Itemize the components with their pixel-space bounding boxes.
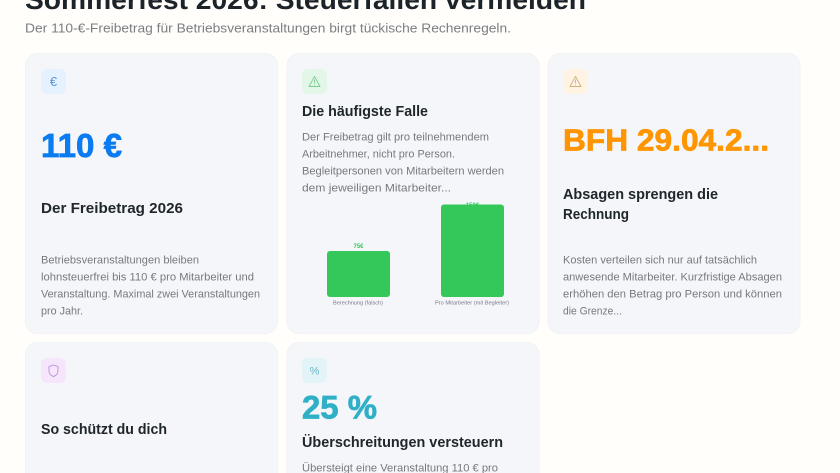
body text xyxy=(563,254,782,318)
heading: Rechnung xyxy=(563,206,629,223)
heading: Der Freibetrag 2026 xyxy=(41,200,183,217)
body text: Kosten verteilen sich nur auf tatsächlich xyxy=(563,254,757,266)
icon: euro: € xyxy=(50,74,58,89)
axis label: Berechnung (falsch) xyxy=(333,300,383,306)
bar chart xyxy=(327,203,509,306)
value: BFH 29.04.2...: BFH 29.04.2... xyxy=(563,122,769,158)
panel: Überschreitungen versteuern xyxy=(287,342,539,473)
body text: die Grenze... xyxy=(563,306,622,318)
panel: Der Freibetrag 2026 xyxy=(26,54,278,334)
body text: pro Jahr. xyxy=(41,306,83,318)
body text: Betriebsveranstaltungen bleiben xyxy=(41,254,199,266)
value label: 75 €: 75€ xyxy=(353,244,364,250)
value label: 150 €: 150€ xyxy=(466,203,480,209)
axis label: Pro Mitarbeiter (mit Begleiter) xyxy=(435,300,509,306)
panel: Absagen sprengen die Rechnung xyxy=(548,54,800,334)
body text: Veranstaltung. Maximal zwei Veranstaltungen xyxy=(41,288,260,300)
body text: erhöhen den Betrag pro Person und können xyxy=(563,288,782,300)
body text xyxy=(302,132,504,194)
heading: Die häufigste Falle xyxy=(302,103,428,120)
icon: warning green xyxy=(302,69,327,94)
value: 25 %: 25 % xyxy=(302,390,377,426)
heading xyxy=(563,186,718,223)
icon: warning orange xyxy=(563,69,588,94)
heading: So schützt du dich xyxy=(41,421,167,438)
icon: euro xyxy=(41,69,66,94)
icon: percent xyxy=(302,358,327,383)
bar: Berechnung (falsch) xyxy=(327,251,390,297)
subtitle: Der 110-€-Freibetrag für Betriebsveranstaltungen birgt tückische Rechenregeln. xyxy=(25,20,511,36)
body text: dem jeweiligen Mitarbeiter... xyxy=(302,182,451,194)
panel: Die häufigste Falle xyxy=(287,54,539,334)
body text xyxy=(41,254,260,318)
body text: anwesende Mitarbeiter. Kurzfristige Absagen xyxy=(563,272,782,284)
icon: percent: % xyxy=(310,366,320,378)
value: 110 €: 110 € xyxy=(41,127,122,164)
body text: Arbeitnehmer, nicht pro Person. xyxy=(302,148,455,160)
icon: shield xyxy=(41,358,66,383)
body text: lohnsteuerfrei bis 110 € pro Mitarbeiter und xyxy=(41,272,254,284)
panel: So schützt du dich xyxy=(26,342,278,473)
bar: Pro Mitarbeiter (mit Begleiter) xyxy=(441,204,504,297)
body text: Der Freibetrag gilt pro teilnehmendem xyxy=(302,132,489,144)
heading: Überschreitungen versteuern xyxy=(302,434,503,451)
heading: Absagen sprengen die xyxy=(563,186,718,203)
body text: Begleitpersonen von Mitarbeitern werden xyxy=(302,166,504,178)
